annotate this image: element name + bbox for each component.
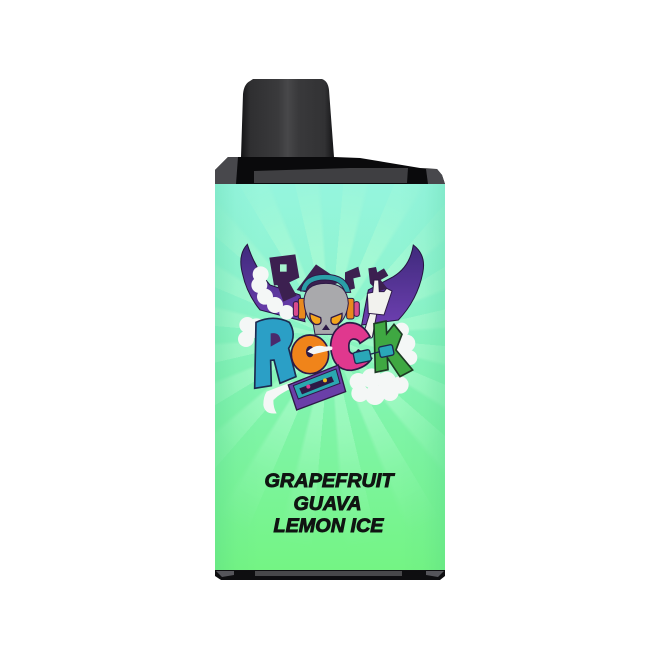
text: GUAVA: GUAVA <box>294 493 362 515</box>
icon: glasses <box>353 344 394 364</box>
icon: collar cap <box>215 157 445 184</box>
icon: smoke through O <box>307 346 332 354</box>
icon: back letters ROCK <box>269 254 388 302</box>
icon: left wing <box>241 244 305 322</box>
icon: letter K <box>374 321 413 377</box>
icon: letter O <box>291 335 329 374</box>
illustration: Rock Rock logo <box>238 244 424 414</box>
icon: base cap <box>215 570 445 580</box>
text: LEMON ICE: LEMON ICE <box>274 515 385 537</box>
icon: letter C <box>331 323 372 370</box>
icon: smoke clouds <box>238 266 417 414</box>
text: GRAPEFRUIT: GRAPEFRUIT <box>264 470 396 492</box>
panel: device body with green sunburst wrap <box>215 184 445 570</box>
text: flavour name <box>264 470 396 537</box>
icon: right wing <box>362 245 424 325</box>
icon: mouthpiece <box>241 79 334 157</box>
icon: rock hand and bone <box>363 280 392 338</box>
icon: cassette tape <box>288 365 346 410</box>
icon: skull with headphones <box>293 274 359 334</box>
icon: letter R <box>255 318 296 388</box>
